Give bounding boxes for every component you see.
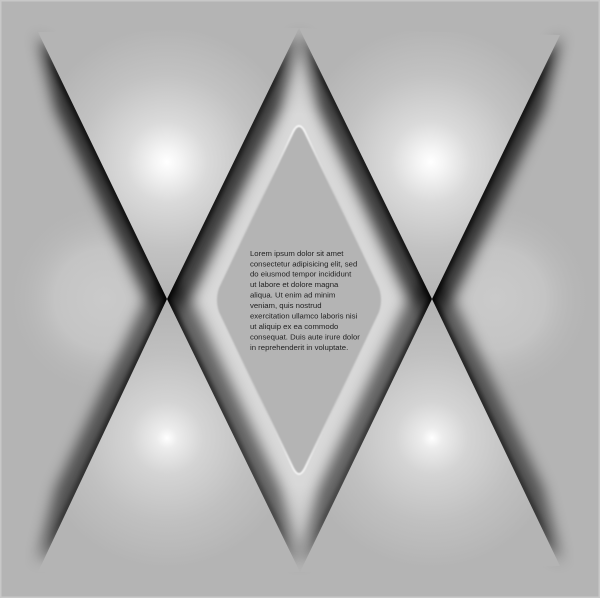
- soft side glow right: [432, 150, 600, 450]
- text block: do eiusmod tempor incididunt: [250, 270, 352, 278]
- tight contact shadows along the X edges: [38, 28, 560, 572]
- panel: top-left triangle: [38, 28, 299, 299]
- text block: aliqua. Ut enim ad minim: [250, 290, 335, 300]
- text block: consequat. Duis aute irure dolor: [250, 332, 360, 342]
- soft side glow left: [0, 150, 167, 450]
- panel: top-right triangle: [299, 28, 560, 299]
- text block: consectetur adipisicing elit, sed: [250, 260, 357, 268]
- center rhombus base: [167, 28, 432, 572]
- text block: exercitation ullamco laboris nisi: [250, 312, 358, 320]
- text block: [250, 249, 360, 352]
- text block: veniam, quis nostrud: [250, 301, 322, 310]
- text block: ut aliquip ex ea commodo: [250, 322, 338, 331]
- text block: Lorem ipsum dolor sit amet: [250, 249, 344, 258]
- panel: bottom-right triangle: [300, 299, 560, 572]
- text block: in reprehenderit in voluptate.: [250, 343, 348, 352]
- panel: bottom-left triangle: [38, 299, 300, 572]
- wide cast shadows along the X edges: [38, 34, 561, 564]
- panel: central diamond: [217, 126, 381, 474]
- text block: ut labore et dolore magna: [250, 280, 339, 289]
